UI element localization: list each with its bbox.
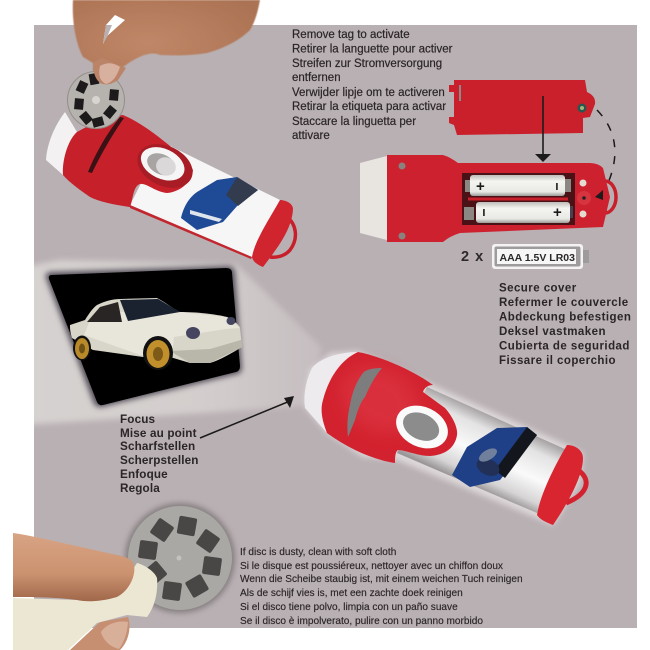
battery icon: AAA 1.5V LR03 [500, 252, 575, 264]
battery bottom [464, 202, 573, 223]
cleaning instruction text: Wenn die Scheibe staubig ist, mit einem weichen Tuch reinigen [240, 574, 523, 585]
instruction text: remove tag: Retirer la languette pour activer [292, 44, 453, 56]
cleaning instruction text: Si le disque est poussiéreux, nettoyer avec un chiffon doux [240, 561, 503, 572]
large film disc [125, 503, 235, 613]
projected image panel [46, 266, 242, 407]
flashlight: open battery compartment [360, 155, 616, 242]
lens [304, 352, 358, 433]
blue car decal [452, 427, 537, 487]
instruction text: remove tag: entfernen [292, 72, 341, 84]
flashlight: projecting [304, 351, 586, 525]
instruction text: remove tag: Remove tag to activate [292, 29, 410, 41]
switch [130, 136, 200, 196]
instruction text: secure cover: Refermer le couvercle [499, 297, 629, 309]
battery compartment [462, 173, 575, 225]
cloth [13, 563, 157, 650]
film disc [68, 72, 124, 128]
instruction text: secure cover [499, 282, 631, 367]
blue car decal [181, 177, 258, 230]
focus text: Scharfstellen [120, 440, 195, 453]
red end cap and loop [566, 470, 586, 503]
instruction text: remove tag: Verwijder lipje om te activeren [292, 87, 445, 99]
instruction text: remove tag: Retirar la etiqueta para activar [292, 101, 446, 113]
focus text: Enfoque [120, 468, 168, 481]
hand holding disc [73, 0, 260, 85]
focus text: Mise au point [120, 427, 197, 440]
red head [322, 352, 457, 463]
focus text: Regola [120, 482, 160, 495]
white flashlight body [130, 142, 280, 257]
battery top: + [476, 178, 485, 195]
lens window [389, 397, 455, 457]
red end cap and loop [270, 217, 295, 257]
red head [63, 115, 193, 207]
cleaning instruction text: Als de schijf vies is, met een zachte doek reinigen [240, 588, 463, 599]
arrow: focus to dial [200, 396, 294, 438]
fingertip over disc [94, 58, 126, 84]
instruction text: secure cover: Abdeckung befestigen [499, 312, 631, 324]
battery cover [449, 80, 595, 135]
focus text [120, 413, 199, 495]
arrow: cover to compartment [535, 96, 551, 162]
dashed curved arrow [597, 110, 615, 183]
thumbnail [101, 621, 128, 649]
flashlight: inserting disc [46, 0, 295, 267]
cleaning instruction text: If disc is dusty, clean with soft cloth [240, 547, 396, 558]
focus text: Focus [120, 413, 156, 426]
instruction text: remove tag: Staccare la linguetta per [292, 116, 416, 128]
cleaning instruction text [240, 547, 523, 627]
instruction text: secure cover: Cubierta de seguridad [499, 340, 630, 352]
arrow head at screw hole [595, 190, 603, 200]
disc slot [88, 117, 124, 173]
cleaning instruction text: Si el disco tiene polvo, limpia con un paño suave [240, 602, 458, 613]
focus text: Scherpstellen [120, 454, 199, 467]
light beam from projector [20, 260, 322, 425]
focus wheel [347, 368, 382, 437]
silver body [397, 387, 567, 513]
instruction text: remove tag: attivare [292, 130, 330, 142]
battery top [465, 175, 571, 196]
instruction text: secure cover: Secure cover [499, 282, 577, 294]
cleaning instruction text: Se il disco è impolverato, pulire con un panno morbido [240, 616, 483, 627]
battery requirement: 2 x [461, 249, 484, 265]
instruction text: secure cover: Deksel vastmaken [499, 326, 606, 338]
battery requirement [461, 244, 589, 269]
instruction text: remove tag [292, 29, 453, 142]
battery bottom: + [553, 204, 562, 221]
instruction text: secure cover: Fissare il coperchio [499, 355, 616, 367]
thumb [70, 617, 129, 650]
instruction text: remove tag: Streifen zur Stromversorgung [292, 58, 442, 70]
white lens [46, 112, 77, 175]
finger [13, 533, 134, 601]
white sports car [70, 298, 242, 370]
hand with cleaning cloth [13, 533, 157, 650]
